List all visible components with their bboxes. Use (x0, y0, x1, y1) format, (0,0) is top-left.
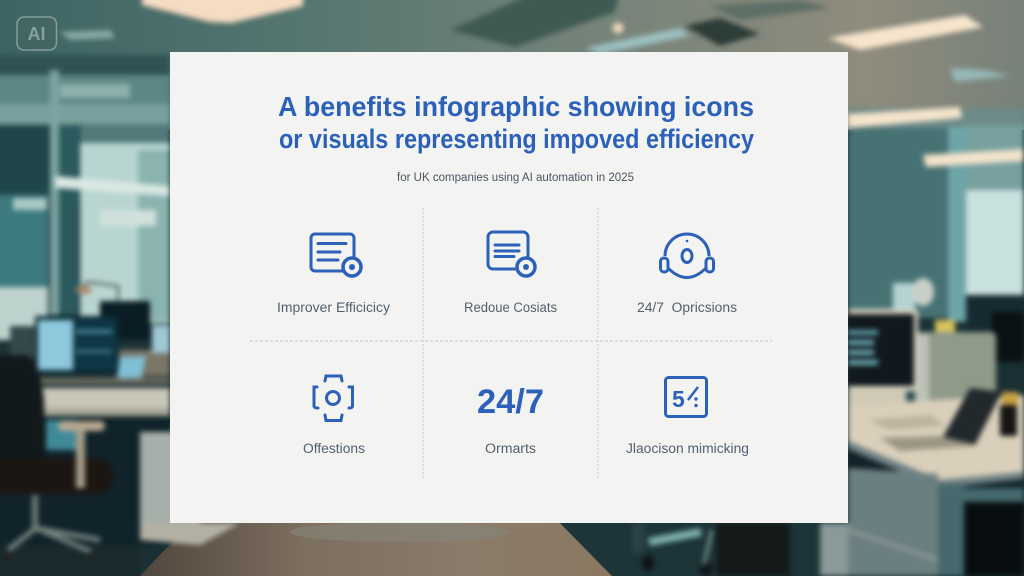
icon: score box (666, 378, 706, 416)
big number: 24/7: 24/7 (477, 383, 544, 421)
AI badge (17, 17, 56, 50)
label: improver efficicicy: Improver Efficicicy (277, 300, 390, 315)
title (278, 91, 754, 154)
subtitle: for UK companies using AI automation in 2025 (397, 172, 634, 184)
AI badge: AI (28, 24, 46, 44)
label: 24/7 options: 24/7 Opricsions (637, 300, 737, 315)
title: or visuals representing impoved efficiency (279, 124, 754, 154)
ceiling fixtures (142, 0, 303, 23)
icon: headset (660, 234, 714, 278)
title: A benefits infographic showing icons (278, 91, 754, 122)
floor items (140, 523, 240, 545)
label: ormarts: Ormarts (485, 441, 536, 456)
left chair (0, 355, 46, 480)
label: reduce costs: Redoue Cosiats (464, 300, 557, 315)
icon: document with coin (488, 232, 535, 276)
right side of the scene (848, 108, 1024, 133)
icon: focus target (314, 376, 352, 420)
panel: benefits card (170, 52, 848, 523)
icon: document with badge (311, 234, 361, 276)
left side of the scene (0, 55, 170, 75)
label: decision mimicking: Jlaocison mimicking (626, 441, 749, 456)
icon: score box: 5 (672, 386, 685, 412)
label: offestions: Offestions (303, 441, 365, 456)
